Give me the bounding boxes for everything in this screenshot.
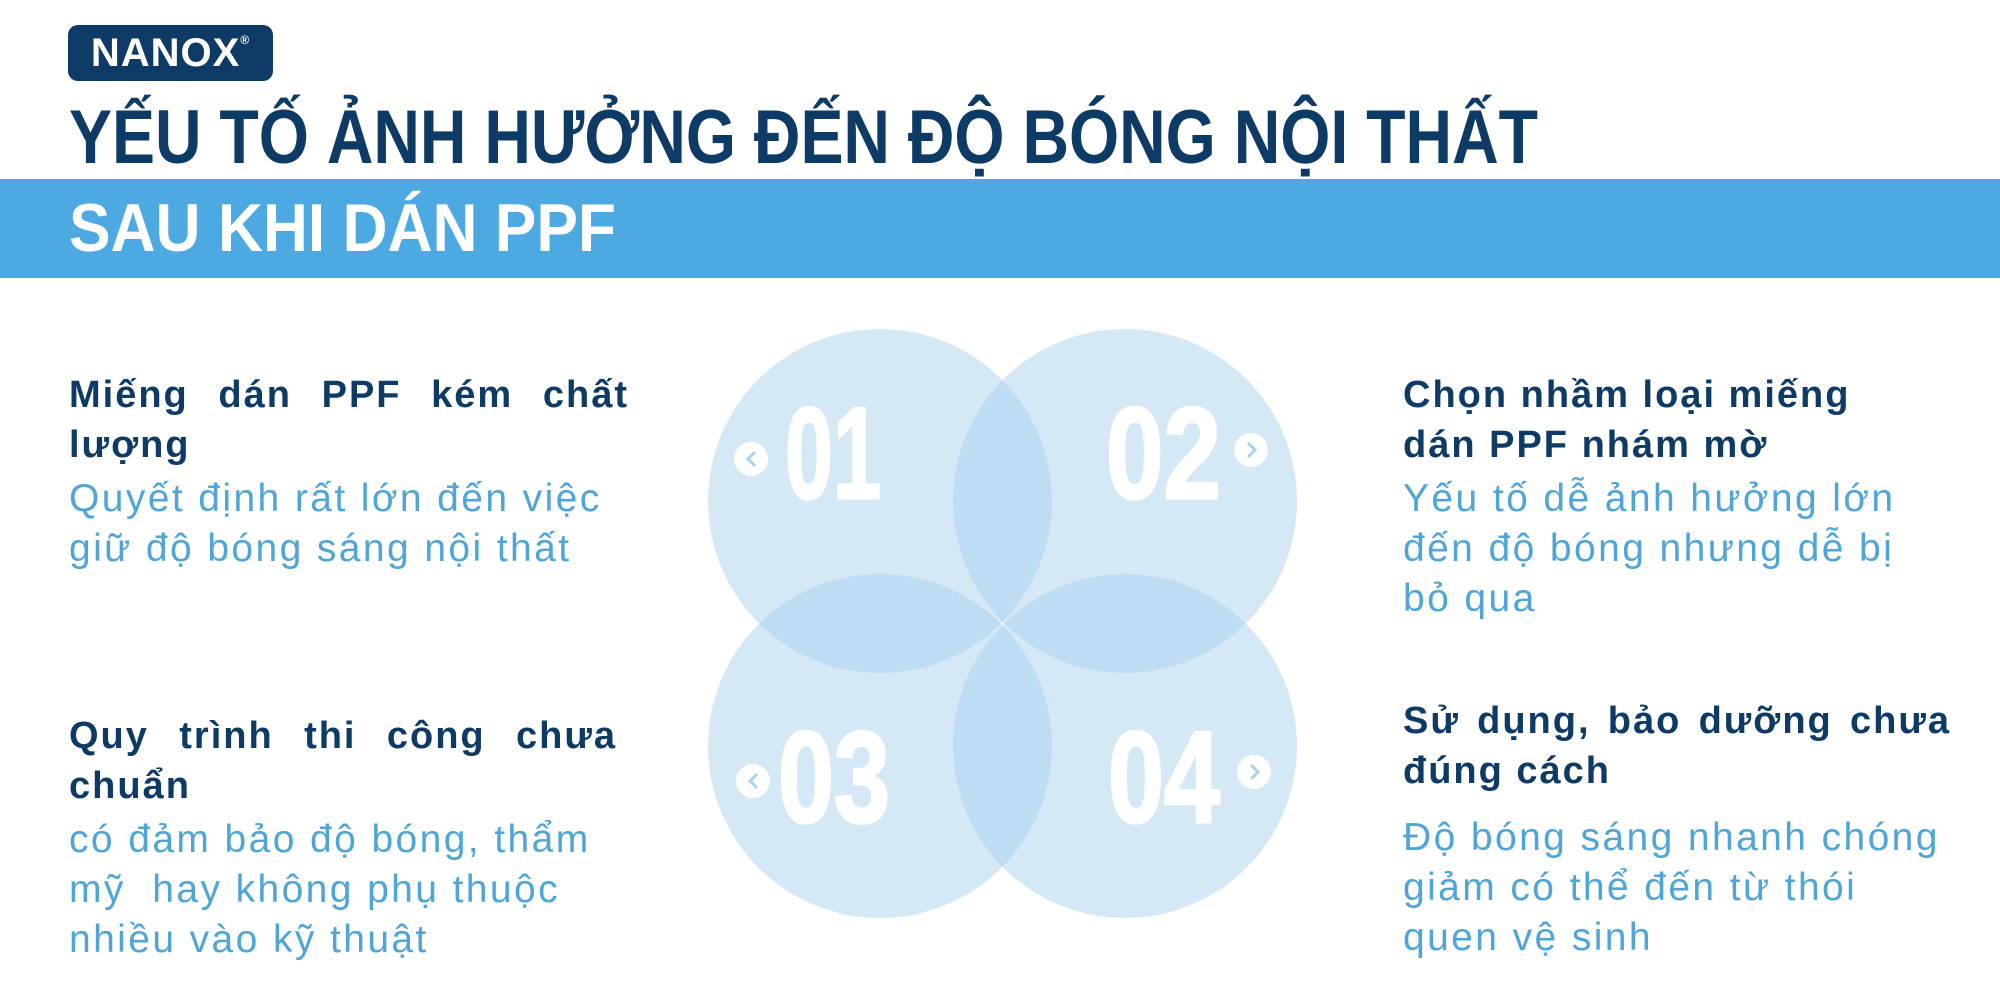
text block 2: dán PPF nhám mờ [1403,424,1768,466]
venn diagram: 04 [1108,704,1220,850]
text block 2 [1403,374,1895,620]
text block 4: Sử dụng, bảo dưỡng chưa đúng cách [1403,700,1951,792]
text block 2: Chọn nhầm loại miếng [1403,374,1850,416]
text block 1: Miếng dán PPF kém chất lượng [69,374,629,466]
text block 2: đến độ bóng nhưng dễ bị [1403,527,1894,570]
logo [68,25,273,81]
title [69,94,1538,266]
text block 3: có đảm bảo độ bóng, thẩm [69,818,591,861]
text block 3: mỹ hay không phụ thuộc [69,868,560,911]
venn diagram: 03 [778,704,890,850]
text block 4: giảm có thể đến từ thói [1403,866,1857,909]
venn diagram: 02 [1106,380,1221,526]
text block 4 [1403,700,1951,959]
text block 4: quen vệ sinh [1403,916,1653,959]
title: SAU KHI DÁN PPF [69,190,616,266]
text block 1 [69,374,629,570]
title band [0,179,2000,278]
text block 2: Yếu tố dễ ảnh hưởng lớn [1403,477,1895,520]
text block 1: giữ độ bóng sáng nội thất [69,527,571,570]
venn diagram: 01 [785,380,881,526]
text block 3: nhiều vào kỹ thuật [69,918,429,961]
text block 2: bỏ qua [1403,577,1537,620]
text block 3 [69,715,617,961]
title: YẾU TỐ ẢNH HƯỞNG ĐẾN ĐỘ BÓNG NỘI THẤT [69,95,1538,180]
logo: NANOX® [91,31,250,75]
text block 3: Quy trình thi công chưa chuẩn [69,715,617,807]
text block 1: Quyết định rất lớn đến việc [69,477,602,520]
text block 4: Độ bóng sáng nhanh chóng [1403,816,1940,859]
